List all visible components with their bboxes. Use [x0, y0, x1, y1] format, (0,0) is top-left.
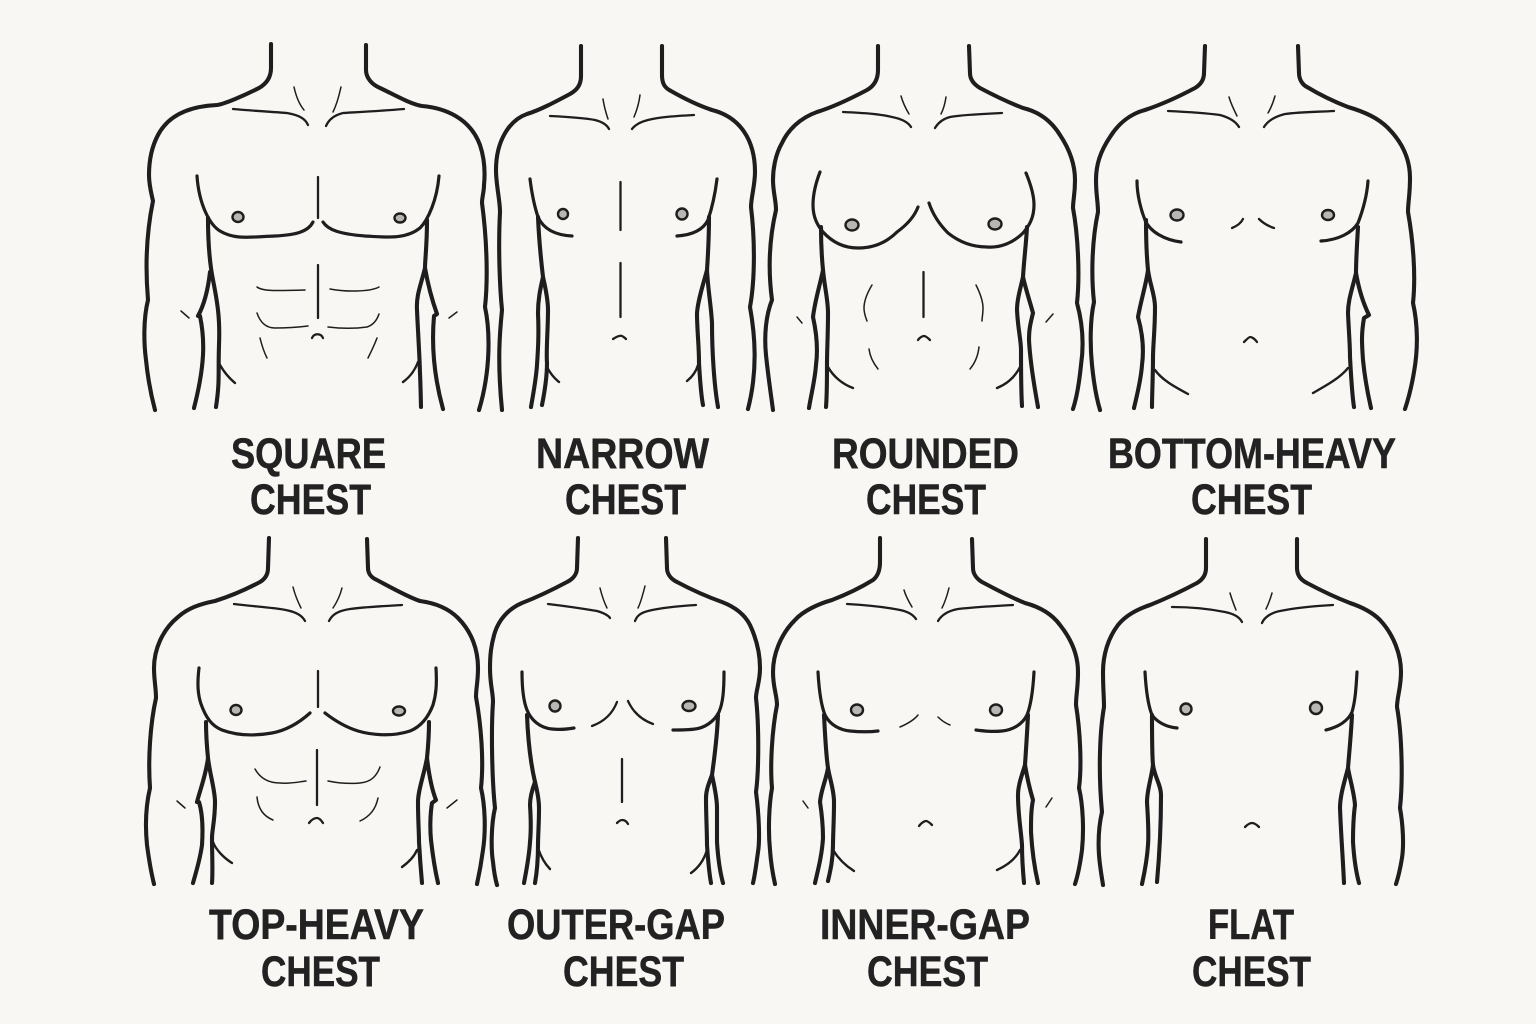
nipples	[1180, 702, 1322, 714]
nipples	[558, 208, 688, 220]
pectoral lines	[813, 172, 1034, 317]
collarbones and neck tendons	[548, 586, 696, 621]
label	[209, 901, 424, 996]
collarbones and neck tendons	[233, 87, 404, 126]
abdominal lines	[181, 265, 457, 358]
pectoral lines	[818, 672, 1034, 732]
pectoral lines	[197, 176, 439, 237]
label	[832, 430, 1019, 524]
panel: outer-gap chest	[490, 538, 760, 996]
pectoral lines	[1145, 672, 1357, 730]
label: TOP-HEAVY	[209, 901, 424, 949]
label: BOTTOM-HEAVY	[1108, 430, 1396, 478]
label	[1108, 430, 1396, 524]
collarbones and neck tendons	[1172, 593, 1333, 623]
nipples	[846, 218, 1002, 230]
figure: narrow chest torso	[496, 46, 755, 410]
panel: narrow chest	[496, 46, 755, 524]
pectoral lines	[522, 672, 724, 802]
collarbones and neck tendons	[843, 96, 1002, 128]
figure: inner-gap chest torso	[769, 538, 1083, 884]
label: CHEST	[1191, 476, 1312, 524]
abdominal lines	[797, 285, 1053, 369]
navel	[617, 820, 628, 824]
label: CHEST	[261, 948, 380, 996]
nipples	[230, 705, 405, 716]
label: FLAT	[1208, 901, 1294, 949]
panel: bottom-heavy chest	[1091, 46, 1417, 524]
pectoral lines	[198, 668, 436, 805]
navel	[613, 336, 626, 339]
panel: rounded chest	[765, 46, 1083, 524]
collarbones and neck tendons	[550, 95, 694, 129]
nipples	[550, 700, 696, 712]
nipples	[232, 212, 406, 222]
body outline	[144, 44, 489, 410]
label: SQUARE	[231, 430, 386, 478]
figure: flat chest torso	[1099, 539, 1403, 885]
body outline	[146, 538, 485, 884]
figure: outer-gap chest torso	[490, 538, 760, 885]
label	[820, 901, 1030, 996]
figure: rounded chest torso	[765, 46, 1083, 410]
panel: flat chest	[1099, 539, 1403, 996]
label: CHEST	[250, 476, 371, 524]
navel and side ticks	[803, 798, 1052, 826]
nipples	[1170, 210, 1334, 220]
navel	[1245, 823, 1259, 827]
panel: top-heavy chest	[146, 538, 485, 996]
body outline	[496, 46, 755, 410]
abdominal lines	[177, 767, 457, 823]
label	[231, 430, 386, 524]
label: OUTER-GAP	[507, 901, 725, 949]
nipples	[851, 704, 1002, 716]
collarbones and neck tendons	[1168, 96, 1334, 127]
body outline	[1091, 46, 1417, 410]
body outline	[1099, 539, 1403, 885]
figure: top-heavy chest torso	[146, 538, 485, 884]
body outline	[765, 46, 1083, 410]
label: CHEST	[867, 948, 988, 996]
label: CHEST	[563, 948, 684, 996]
label	[1192, 901, 1311, 996]
panel: square chest	[144, 44, 489, 524]
label	[507, 901, 725, 996]
collarbones and neck tendons	[847, 588, 1013, 621]
pectoral lines	[530, 179, 717, 317]
body outline	[769, 538, 1083, 884]
label: CHEST	[866, 476, 986, 524]
collarbones and neck tendons	[234, 587, 402, 621]
label: CHEST	[565, 476, 686, 524]
body outline	[490, 538, 760, 885]
label: INNER-GAP	[820, 901, 1030, 949]
label: NARROW	[536, 430, 709, 478]
panel: inner-gap chest	[769, 538, 1083, 996]
navel	[1244, 337, 1257, 342]
figure: bottom-heavy chest torso	[1091, 46, 1417, 410]
label: CHEST	[1192, 948, 1311, 996]
label	[536, 430, 709, 524]
label: ROUNDED	[832, 430, 1019, 478]
pectoral lines	[1137, 181, 1368, 242]
figure: square chest torso	[144, 44, 489, 410]
